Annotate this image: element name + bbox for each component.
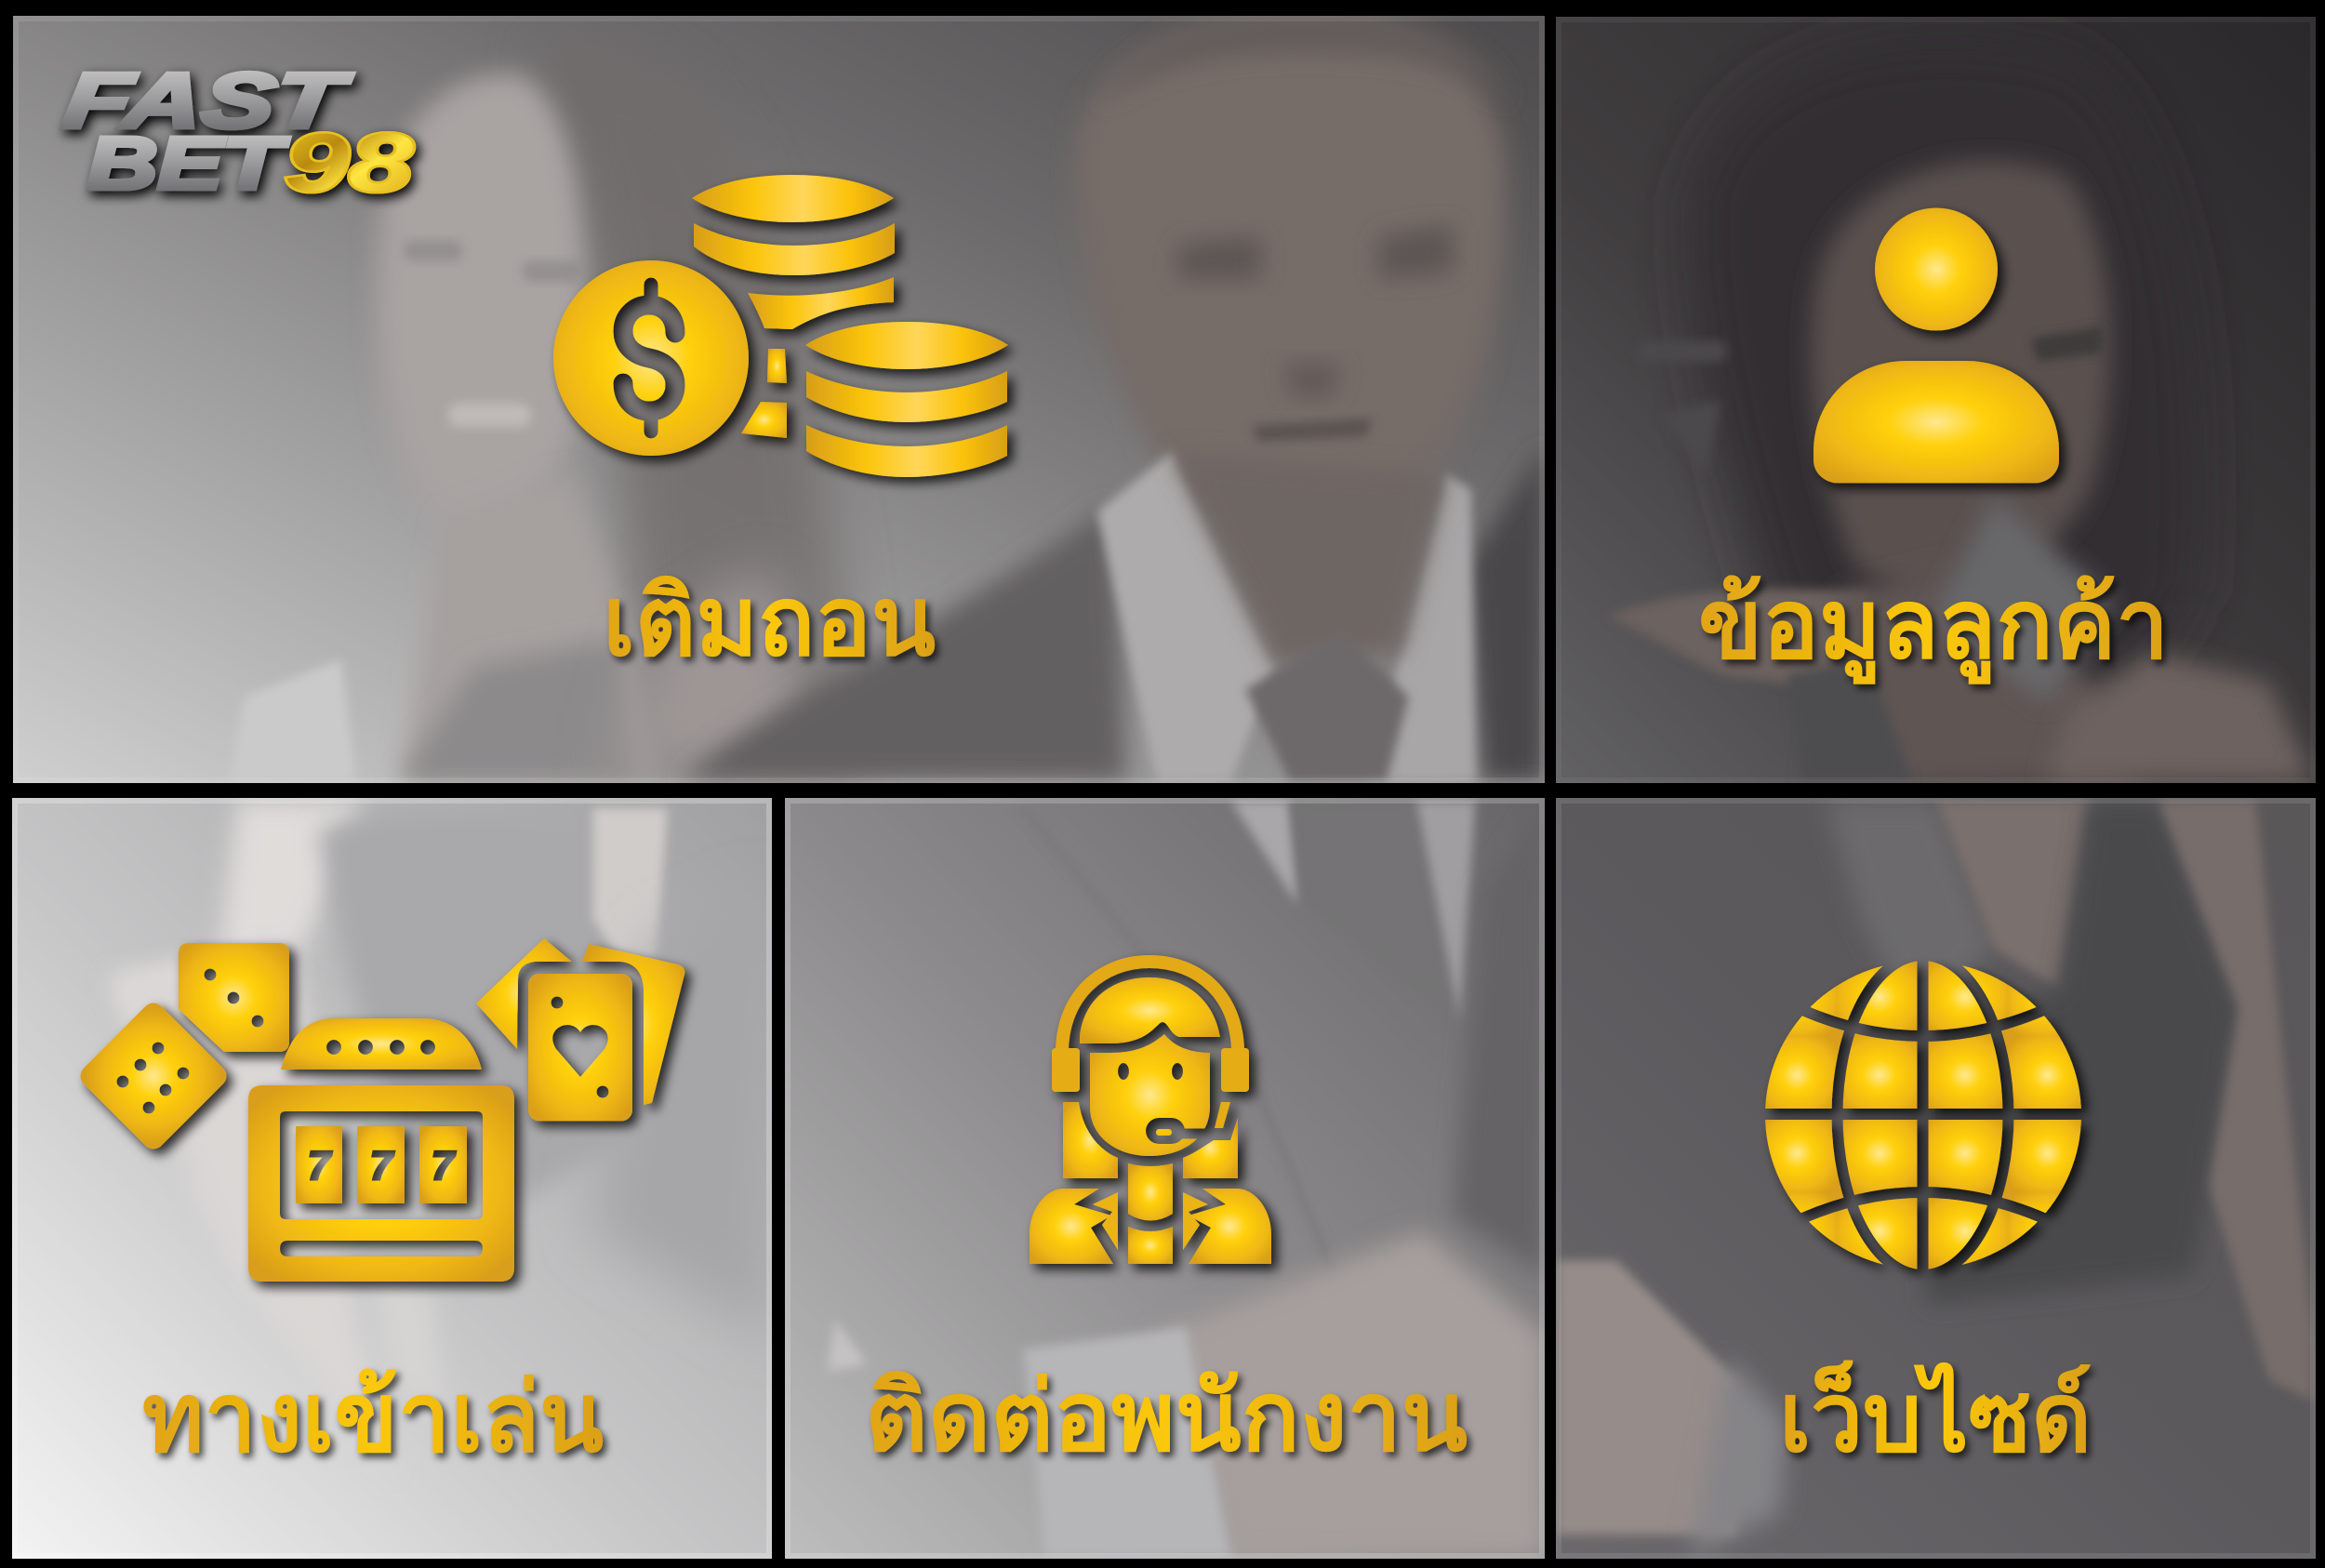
panel edge highlight bbox=[788, 801, 1542, 1556]
label: top up and withdraw: เติมถอน bbox=[603, 568, 936, 676]
label: play entrance: ทางเข้าเล่น bbox=[142, 1364, 604, 1472]
panel: deposit and withdrawal bbox=[13, 15, 1545, 783]
front card with heart bbox=[528, 974, 632, 1122]
panel edge highlight bbox=[15, 801, 769, 1556]
label: website: เว็บไซด์ bbox=[1779, 1359, 2092, 1472]
die with six dots bbox=[76, 999, 231, 1153]
label: contact staff: ติดต่อพนักงาน bbox=[865, 1363, 1468, 1471]
background photo: man in suit bbox=[785, 798, 1545, 1559]
slot machine body bbox=[248, 1085, 514, 1282]
panel edge highlight bbox=[16, 19, 1542, 780]
panel: entrance to play bbox=[12, 798, 772, 1559]
slot machine top bbox=[281, 1018, 482, 1070]
icon: customer support agent bbox=[1030, 962, 1271, 1264]
background photo: woman in dark dress bbox=[1556, 798, 2316, 1559]
brand logo bbox=[59, 57, 413, 208]
slot reels 777 bbox=[296, 1126, 467, 1203]
icon: coin stacks bbox=[553, 175, 1008, 477]
background photo: woman in lace dress bbox=[12, 798, 772, 1559]
logo number 98: 98 bbox=[285, 116, 413, 208]
label: customer information: ข้อมูลลูกค้า bbox=[1698, 571, 2169, 684]
logo word BET: BET bbox=[87, 122, 289, 205]
icon: globe bbox=[1758, 958, 2087, 1270]
panel edge highlight bbox=[1559, 20, 2313, 780]
logo word FAST: FAST bbox=[59, 57, 355, 144]
panel edge highlight bbox=[1559, 801, 2313, 1556]
background photo: woman holding card bbox=[1556, 17, 2316, 783]
icon: dice, slot machine and cards bbox=[76, 938, 684, 1282]
panel: contact staff bbox=[785, 798, 1545, 1559]
icon: user profile bbox=[1814, 208, 2059, 484]
die with three dots bbox=[179, 943, 289, 1052]
back cards bbox=[476, 938, 572, 1049]
background photo: woman and man bbox=[13, 15, 1545, 783]
panel: website bbox=[1556, 798, 2316, 1559]
panel: customer info bbox=[1556, 17, 2316, 783]
